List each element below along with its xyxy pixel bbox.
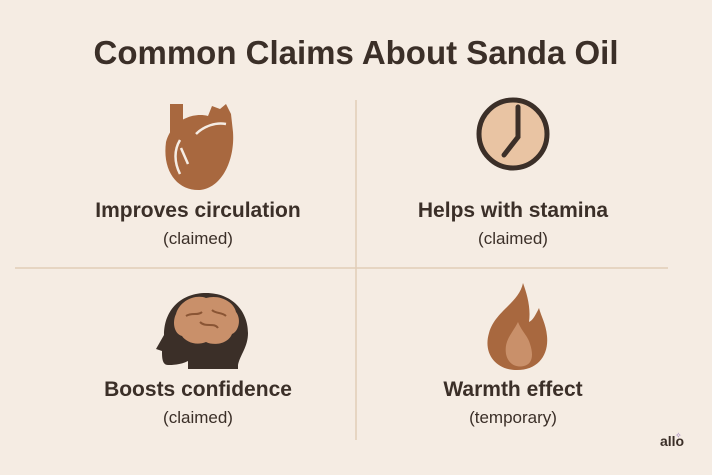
text: stamina bbox=[418, 199, 608, 248]
text: confidence: (claimed) bbox=[163, 408, 233, 427]
text: warmth bbox=[443, 378, 583, 427]
text: confidence: Boosts confidence bbox=[104, 378, 292, 401]
text: stamina: Helps with stamina bbox=[418, 199, 608, 222]
logo: allo bbox=[660, 433, 684, 449]
text: circulation bbox=[95, 199, 301, 248]
text: circulation: (claimed) bbox=[163, 229, 233, 248]
logo: ✧ bbox=[675, 431, 682, 440]
text: warmth: Warmth effect bbox=[443, 378, 583, 401]
icon: clock bbox=[479, 100, 547, 168]
icon: flame bbox=[487, 283, 547, 370]
title: Common Claims About Sanda Oil bbox=[94, 34, 618, 71]
text: stamina: (claimed) bbox=[478, 229, 548, 248]
text: warmth: (temporary) bbox=[469, 408, 557, 427]
icon: head with brain bbox=[156, 293, 248, 369]
text: confidence bbox=[104, 378, 292, 427]
icon: heart bbox=[165, 104, 233, 190]
text: circulation: Improves circulation bbox=[95, 199, 301, 222]
